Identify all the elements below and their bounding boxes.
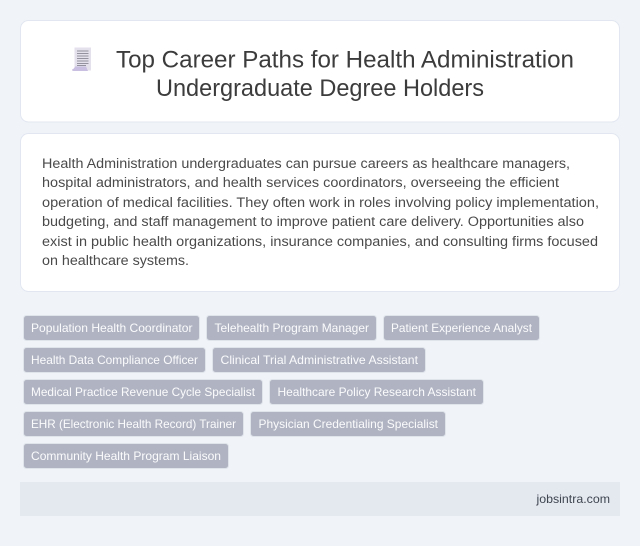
tag: Community Health Program Liaison: Community Health Program Liaison [31, 449, 221, 463]
tag: Medical Practice Revenue Cycle Specialist: Medical Practice Revenue Cycle Specialist [31, 385, 256, 399]
tag: Population Health Coordinator [24, 316, 200, 340]
title: Undergraduate Degree Holders [156, 75, 484, 102]
text block: summary paragraph: on healthcare systems. [42, 253, 189, 269]
tag: Clinical Trial Administrative Assistant: Clinical Trial Administrative Assistant [220, 353, 419, 367]
tag: Physician Credentialing Specialist: Physician Credentialing Specialist [258, 417, 439, 431]
text block: summary paragraph: operation of medical facilities. They often work in roles involving policy implementation, [42, 195, 599, 211]
tag: Healthcare Policy Research Assistant: Healthcare Policy Research Assistant [278, 385, 477, 399]
title [116, 46, 574, 102]
tag: Medical Practice Revenue Cycle Specialist [24, 380, 262, 404]
tag: Physician Credentialing Specialist [250, 412, 446, 436]
tag: Telehealth Program Manager: Telehealth Program Manager [214, 321, 369, 335]
tag: Health Data Compliance Officer [24, 348, 206, 372]
tag: Patient Experience Analyst: Patient Experience Analyst [391, 321, 533, 335]
tag: Clinical Trial Administrative Assistant [212, 348, 426, 372]
footer source text: jobsintra.com [535, 492, 610, 506]
tag: EHR Trainer [24, 412, 244, 436]
tag: Community Health Program Liaison [24, 444, 228, 468]
tag: Population Health Coordinator: Population Health Coordinator [31, 321, 192, 335]
tag: EHR Trainer: EHR (Electronic Health Record) Trainer [31, 417, 236, 431]
tag: Health Data Compliance Officer: Health Data Compliance Officer [31, 353, 198, 367]
tag: Patient Experience Analyst [384, 316, 540, 340]
panel: title card [20, 20, 620, 122]
text block: summary paragraph: budgeting, and staff management to improve patient care delivery. Opportunities also [42, 214, 584, 230]
tag: Telehealth Program Manager [206, 316, 376, 340]
text block: summary paragraph [42, 156, 599, 269]
panel: summary text card [20, 134, 620, 292]
icon: document scroll [72, 48, 91, 71]
footer bar [20, 482, 620, 516]
title: Top Career Paths for Health Administration [116, 46, 574, 74]
tag: Healthcare Policy Research Assistant [270, 380, 484, 404]
text block: summary paragraph: exist in public health organizations, insurance companies, and consulting firms focused [42, 234, 598, 250]
text block: summary paragraph: hospital administrators, and health services coordinators, overseeing the efficient [42, 175, 559, 191]
text block: summary paragraph: Health Administration undergraduates can pursue careers as healthcare managers, [42, 156, 570, 172]
career tags [24, 316, 540, 468]
